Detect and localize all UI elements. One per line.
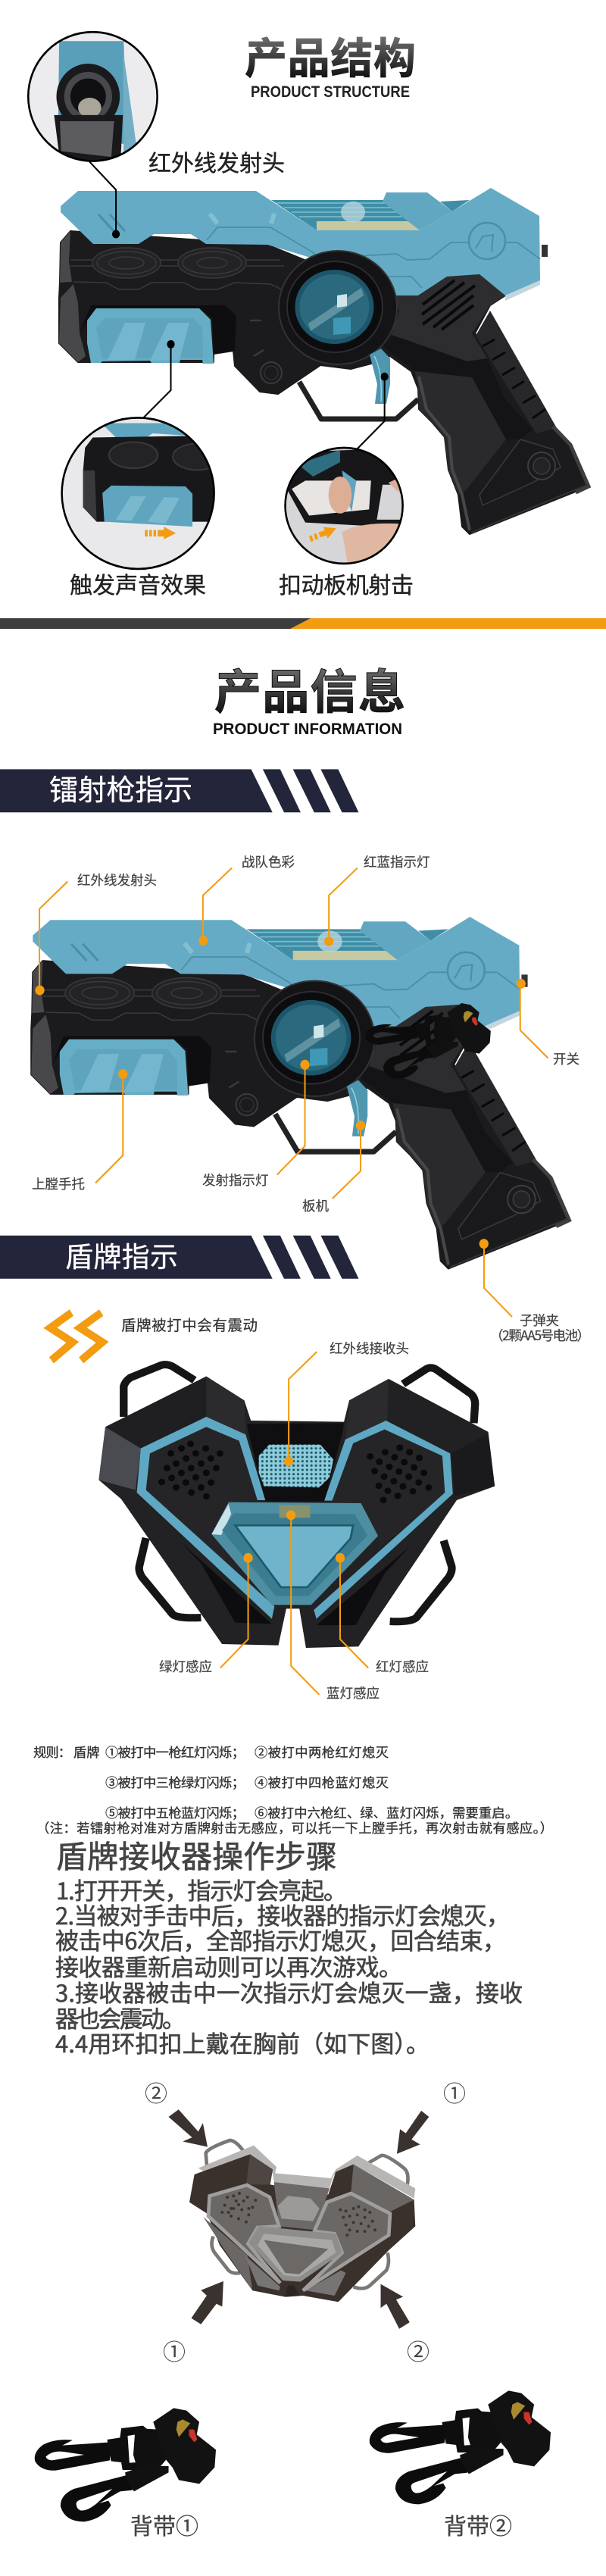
callout: red blue indicator: 红蓝指示灯 [364, 852, 430, 871]
grip upper panel [392, 274, 505, 361]
callout: infrared receiver: 红外线接收头 [330, 1339, 409, 1358]
number markers: ② [145, 2075, 167, 2109]
callout: magazine: （2颗AA5号电池） [490, 1326, 590, 1345]
callout: fire indicator: 发射指示灯 [202, 1171, 268, 1190]
light rim [198, 2146, 415, 2199]
fabric band [433, 1017, 456, 1048]
inset: grip pad sound effect [58, 415, 221, 571]
leader line: emitter [89, 161, 120, 238]
number markers: ① [443, 2075, 466, 2109]
grip butt [479, 439, 561, 505]
orange arrow [145, 527, 176, 539]
title: product information: 产品信息 [214, 654, 405, 722]
receiver window [259, 1445, 333, 1487]
text block: rules: ③被打中三枪绿灯闪烁； [105, 1772, 245, 1791]
facets [98, 1427, 141, 1490]
strap clipped on gun [365, 1003, 491, 1079]
callout: switch: 开关 [553, 1049, 579, 1068]
orange arrow [309, 527, 336, 542]
callout: upper chamber grip [32, 1069, 127, 1193]
lower bracket details [261, 362, 282, 383]
arrow: lower right [381, 2284, 410, 2329]
banner: laser gun instructions [0, 767, 358, 812]
callout: infrared receiver [284, 1339, 409, 1466]
text block: rules: ⑤被打中五枪蓝灯闪烁； [105, 1802, 245, 1821]
diagram: grey shield with attachment points [189, 2140, 415, 2302]
speaker panels [146, 1427, 272, 1606]
callout: infrared emitter: 红外线发射头 [77, 871, 157, 889]
lower dark panels [180, 1542, 272, 1624]
heading: operating steps: 盾牌接收器操作步骤 [56, 1831, 337, 1877]
leader line: trigger [358, 373, 389, 449]
gun photo: annotated [31, 917, 569, 1268]
shield photo [98, 1365, 495, 1648]
label: infrared emitter: 红外线发射头 [148, 145, 285, 178]
grip pad [87, 308, 214, 364]
callout: fire indicator [202, 1060, 310, 1190]
text block: steps: 1.打开开关，指示灯会亮起。 [56, 1872, 347, 1906]
center lens [248, 2226, 342, 2282]
grip band [381, 335, 533, 439]
callout: team colour [198, 852, 295, 946]
window [271, 200, 420, 230]
inset: pulling the trigger [282, 445, 406, 567]
center recess [274, 2182, 330, 2230]
blue top cover [61, 188, 540, 295]
gold clasp and red tab [464, 1011, 473, 1023]
icon: vibration chevrons [50, 1313, 102, 1360]
upper right facet [351, 2165, 414, 2212]
text block: steps: 4.4用环扣扣上戴在胸前（如下图）。 [55, 2025, 430, 2059]
callout: red blue indicator [324, 852, 430, 946]
leader line: grip pad [143, 340, 175, 418]
label: pull trigger to shoot: 扣动板机射击 [279, 567, 414, 600]
label: trigger sound effect: 触发声音效果 [70, 567, 206, 600]
text block: steps: 被击中6次后，全部指示灯熄灭，回合结束， [55, 1922, 506, 1956]
blue trim [137, 1417, 274, 1619]
arrow: lower left [192, 2281, 223, 2324]
text block: rules [33, 1742, 553, 1837]
callout: magazine: 子弹夹 [520, 1311, 559, 1330]
shield body [98, 1377, 495, 1648]
number markers: ① [163, 2334, 186, 2367]
text block: rules: ④被打中四枪蓝灯熄灭 [255, 1772, 389, 1791]
title: product structure: PRODUCT STRUCTURE [251, 83, 410, 101]
loops [206, 2140, 408, 2288]
callout: team colour: 战队色彩 [242, 852, 295, 871]
text block: rules: ⑥被打中六枪红、绿、蓝灯闪烁，需要重启。 [255, 1802, 518, 1821]
front lens [211, 1502, 378, 1605]
callout: red light sensor: 红灯感应 [376, 1657, 429, 1676]
divider bar [0, 618, 606, 629]
text block: rules: 规则： [33, 1742, 71, 1761]
switch [542, 245, 548, 257]
callout: switch [517, 979, 579, 1068]
banner: shield instructions: 盾牌指示 [65, 1234, 178, 1275]
gun body [59, 231, 589, 534]
strap 1 photo [35, 2408, 216, 2521]
label: strap 1: 背带① [130, 2508, 198, 2541]
speaker panels [208, 2185, 280, 2283]
callout: green light sensor: 绿灯感应 [159, 1657, 212, 1676]
number markers: ② [407, 2334, 430, 2367]
banner: shield instructions [0, 1234, 358, 1279]
swivel [416, 1015, 445, 1044]
callout: trigger [302, 1121, 365, 1215]
lower clip [383, 1048, 433, 1079]
callout: magazine [479, 1239, 590, 1345]
notch [286, 2286, 299, 2297]
upper clip [365, 1024, 418, 1045]
callout: upper chamber grip: 上膛手托 [32, 1174, 85, 1193]
title: product information: PRODUCT INFORMATION [213, 721, 402, 738]
text block: rules: ②被打中两枪红灯熄灭 [255, 1742, 389, 1761]
text block: steps [55, 1872, 523, 2059]
strap loops [123, 1365, 475, 1621]
trigger [370, 349, 390, 404]
grip front panel [415, 371, 506, 495]
pouch [448, 1003, 491, 1054]
text block: rules: （注：若镭射枪对准对方盾牌射击无感应，可以托一下上膛手托，再次射击就有感应。） [36, 1818, 553, 1837]
inset: infrared emitter close-up [23, 29, 162, 164]
text block: rules: ①被打中一枪红灯闪烁； [105, 1742, 245, 1761]
lower panels [203, 2217, 252, 2290]
callout: trigger: 板机 [302, 1196, 329, 1215]
number markers [145, 2075, 466, 2367]
callout: blue light sensor [286, 1510, 380, 1702]
text block: steps: 3.接收器被击中一次指示灯会熄灭一盏，接收 [55, 1974, 523, 2009]
text: shield vibrates when hit: 盾牌被打中会有震动 [121, 1313, 258, 1335]
label: strap 2: 背带② [444, 2508, 512, 2541]
callout: infrared emitter [35, 871, 157, 996]
gun photo: structure section [59, 188, 589, 534]
callout: green light sensor [159, 1553, 253, 1676]
arrow: upper left [168, 2109, 208, 2147]
grip ribs [476, 311, 557, 433]
round lens housing [279, 251, 397, 364]
title: product structure: 产品结构 [245, 25, 416, 86]
text block: rules: 盾牌 [73, 1742, 100, 1761]
arrow: upper right [397, 2111, 429, 2154]
text block: steps: 2.当被对手击中后，接收器的指示灯会熄灭， [55, 1897, 510, 1931]
callout: red light sensor [336, 1553, 429, 1676]
lower swivel [428, 1042, 458, 1058]
callout: blue light sensor: 蓝灯感应 [326, 1683, 380, 1702]
center cavity [247, 1423, 344, 1502]
trigger guard [299, 382, 418, 419]
dark body [189, 2154, 415, 2302]
barrel ovals [92, 248, 246, 278]
text block: steps: 接收器重新启动则可以再次游戏。 [55, 1949, 402, 1983]
text block: steps: 器也会震动。 [55, 2000, 186, 2034]
banner: laser gun instructions: 镭射枪指示 [49, 767, 192, 808]
strap 2 photo [370, 2390, 551, 2504]
